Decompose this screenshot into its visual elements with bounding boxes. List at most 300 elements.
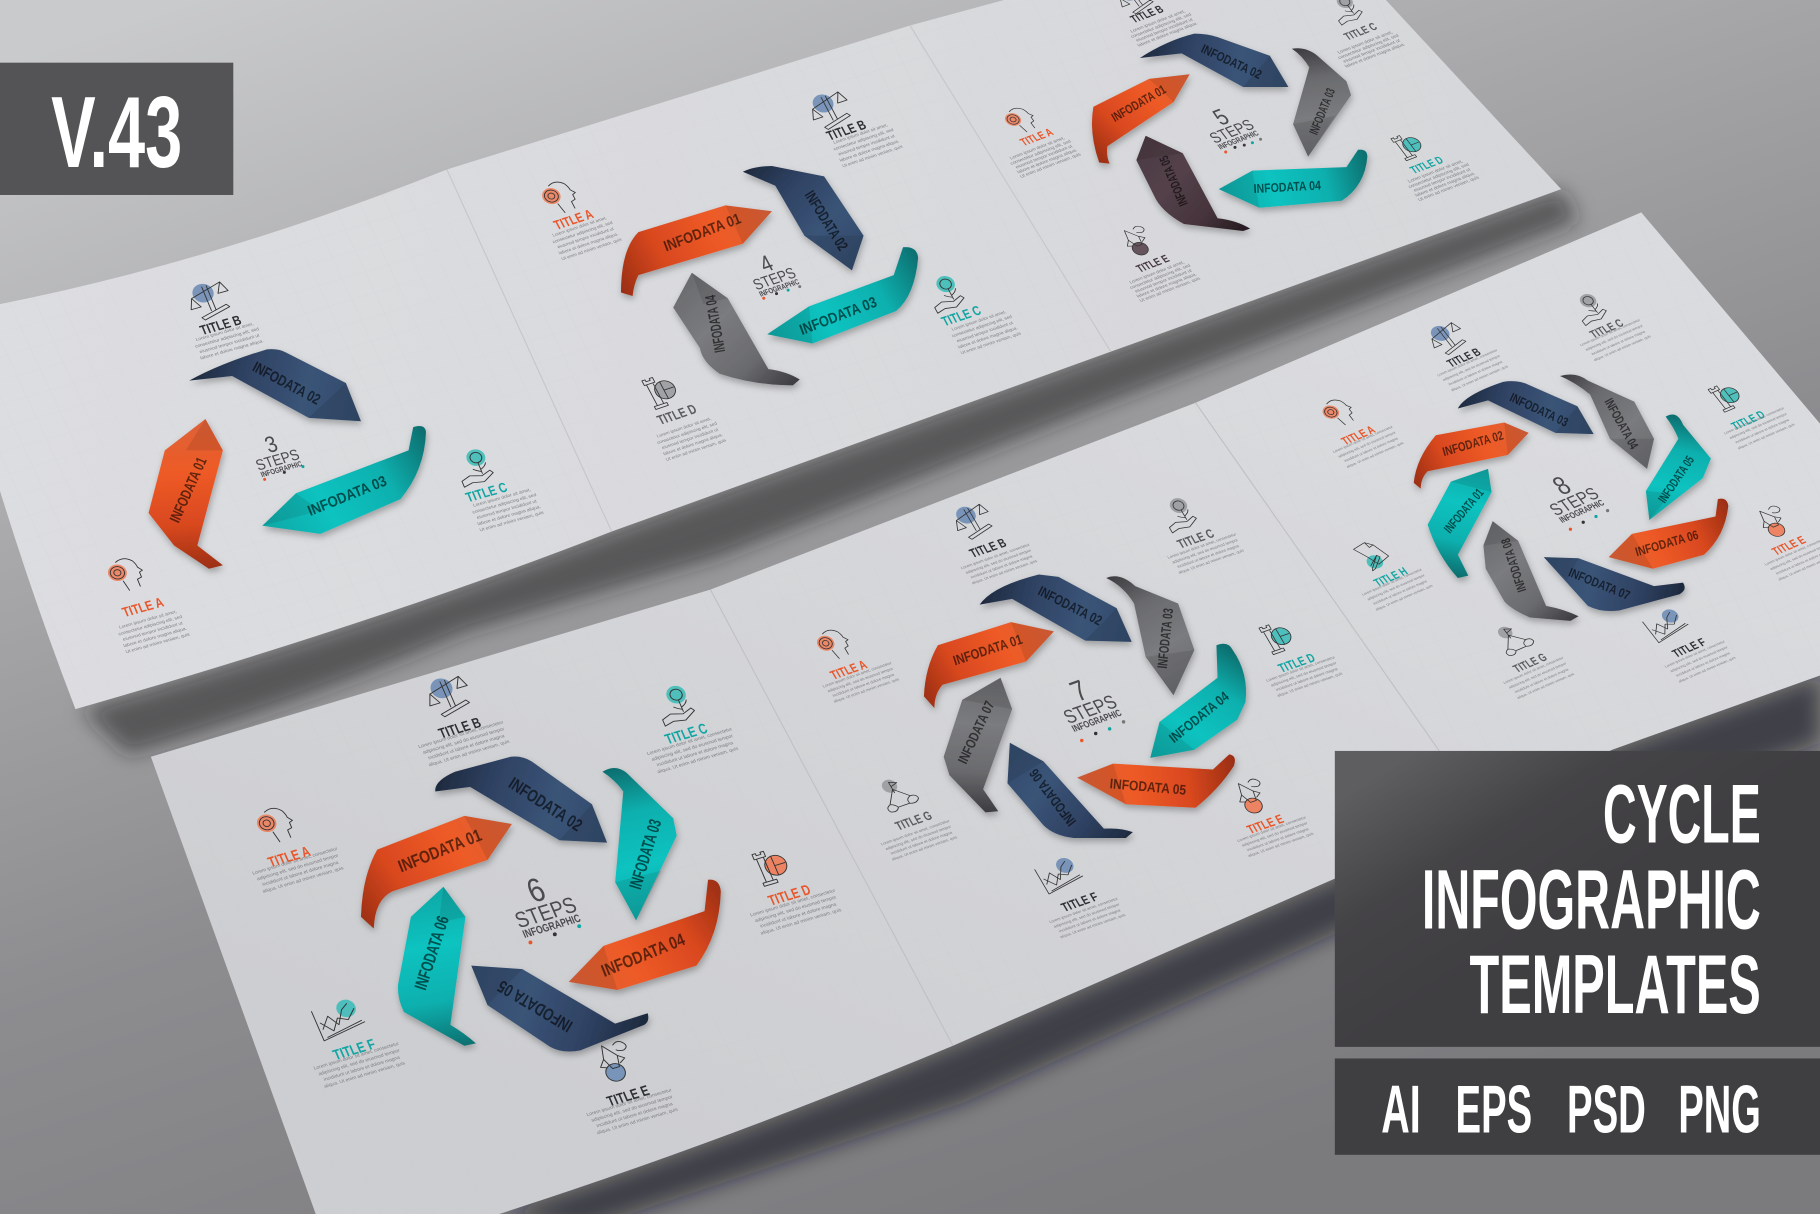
ribbon: infodata 04: INFODATA 04: [1602, 396, 1642, 452]
ribbon: infodata 04: [1150, 644, 1246, 758]
block: title C: [451, 447, 545, 532]
block: title F: TITLE F: [1669, 636, 1709, 660]
center label: 8: [1546, 470, 1577, 500]
block: title B: eiusmod tempor incididunt ut: [1135, 17, 1194, 43]
block: title B: Lorem ipsum dolor sit amet,: [195, 321, 254, 342]
block: title D: Lorem ipsum dolor sit amet, consectetur: [749, 888, 837, 918]
ribbon: infodata 03: INFODATA 03: [625, 817, 665, 891]
block: title B: TITLE B: [824, 117, 869, 143]
block: title A: Lorem ipsum dolor sit amet,: [1009, 136, 1066, 160]
block: title D: [641, 373, 728, 462]
block: title D: aliqua. Ut enim ad minim veniam, quis: [1276, 671, 1343, 698]
block: title A: [1000, 104, 1082, 179]
block: title A: consectetur adipiscing elit, sed: [1009, 139, 1072, 166]
block: title A: [104, 555, 191, 654]
center label: INFOGRAPHIC: [1557, 497, 1606, 525]
center label: STEPS: [253, 446, 302, 474]
block: title E: [1753, 504, 1820, 582]
block: title E: incididunt ut labore et dolore magna: [596, 1101, 674, 1129]
ribbon: infodata 03: [602, 768, 677, 920]
block: title F: adipiscing elit, sed do eiusmod tempor: [1053, 902, 1121, 929]
block: title D: Lorem ipsum dolor sit amet,: [1407, 159, 1464, 184]
block: title C: eiusmod tempor incididunt ut: [1342, 38, 1402, 64]
block: title E: [586, 1039, 681, 1137]
ribbon: infodata 02: [743, 166, 864, 270]
ribbon: infodata 01: INFODATA 01: [1441, 485, 1486, 536]
block: title D: Lorem ipsum dolor sit amet, consectetur: [1723, 406, 1786, 435]
ribbon: infodata 02: INFODATA 02: [1036, 583, 1105, 629]
block: title E: [1231, 777, 1317, 859]
block: title F: incididunt ut labore et dolore magna: [1058, 907, 1122, 933]
block: title F: Lorem ipsum dolor sit amet, consectetur: [1664, 639, 1727, 669]
block: title A: Lorem ipsum dolor sit amet, consectetur: [251, 846, 339, 877]
center label: STEPS: [1545, 483, 1603, 519]
block: title C: incididunt ut labore et dolore magna: [1176, 543, 1240, 569]
block: title C: aliqua. Ut enim ad minim veniam, quis: [1177, 548, 1245, 575]
block: title B: [183, 278, 265, 361]
block: title B: Lorem ipsum dolor sit amet,: [832, 122, 888, 145]
center label: INFOGRAPHIC: [521, 912, 583, 941]
ribbon: infodata 05: INFODATA 05: [494, 976, 576, 1037]
block: title E: adipiscing elit, sed do eiusmod tempor: [1241, 820, 1309, 848]
block: title A: consectetur adipiscing elit, sed: [552, 220, 614, 244]
block: title D: consectetur adipiscing elit, sed: [1407, 162, 1470, 189]
ribbon: infodata 02: INFODATA 02: [1199, 41, 1264, 82]
block: title D: Lorem ipsum dolor sit amet,: [656, 416, 712, 438]
center label: [245, 427, 304, 481]
block: title C: Lorem ipsum dolor sit amet,: [951, 309, 1007, 332]
block: title C: Ut enim ad minim veniam, quis: [479, 510, 545, 532]
block: title B: labore et dolore magna aliqua.: [839, 139, 900, 163]
block: title A: TITLE A: [1018, 126, 1056, 148]
formats panel: AI: [1381, 1073, 1421, 1148]
block: title E: TITLE E: [604, 1083, 652, 1110]
block: title B: incididunt ut labore et dolore magna: [1448, 360, 1504, 386]
block: title C: Ut enim ad minim veniam, quis: [960, 331, 1022, 355]
block: title B: incididunt ut labore et dolore magna: [970, 553, 1034, 579]
block: title B: [1111, 0, 1199, 48]
block: title F: Lorem ipsum dolor sit amet, consectetur: [313, 1041, 400, 1072]
block: title B: aliqua. Ut enim ad minim veniam, quis: [428, 739, 511, 768]
ribbon: infodata 04: [569, 880, 721, 990]
block: title B: [1422, 319, 1511, 393]
ribbon: infodata 06: [1008, 743, 1133, 838]
block: title H: TITLE H: [1371, 565, 1411, 589]
center label: 6: [521, 871, 551, 910]
block: title B: [947, 500, 1040, 586]
block: title C: [646, 683, 742, 776]
block: title B: labore et dolore magna aliqua.: [1136, 21, 1199, 47]
block: title A: Lorem ipsum dolor sit amet, consectetur: [1332, 425, 1395, 454]
block: title E: eiusmod tempor incididunt ut: [1134, 268, 1193, 294]
top sheet: [0, 0, 1561, 709]
block: title E: aliqua. Ut enim ad minim veniam, quis: [596, 1107, 679, 1136]
block: title H: adipiscing elit, sed do eiusmod tempor: [1366, 573, 1426, 601]
block: title G: TITLE G: [892, 808, 935, 833]
block: title C: incididunt ut labore et dolore magna: [1590, 330, 1647, 356]
block: title B: [803, 88, 904, 168]
block: title E: [1118, 224, 1202, 303]
panel: 8 steps diagram: [1317, 291, 1820, 700]
block: title B: Lorem ipsum dolor sit amet, consectetur: [960, 542, 1031, 570]
block: title B: labore et dolore magna aliqua.: [199, 338, 264, 360]
ribbon: infodata 04: [1560, 374, 1654, 469]
block: title A: TITLE A: [266, 844, 313, 871]
ribbon: infodata 01: INFODATA 01: [662, 210, 743, 255]
block: title E: labore et dolore magna aliqua.: [1135, 272, 1198, 299]
center label: [1046, 668, 1125, 742]
version badge: V.43: [51, 77, 182, 189]
block: title A: adipiscing elit, sed do eiusmod tempor: [826, 666, 895, 693]
block: title B: adipiscing elit, sed do eiusmod tempor: [1442, 354, 1502, 382]
block: title C: Lorem ipsum dolor sit amet,: [472, 487, 531, 508]
ribbon: infodata 03: [1458, 381, 1594, 434]
ribbon: infodata 04: INFODATA 04: [1166, 688, 1232, 746]
ribbon: infodata 01: [149, 419, 223, 569]
ribbon: infodata 02: [435, 757, 607, 843]
block: title F: aliqua. Ut enim ad minim veniam, quis: [1678, 656, 1737, 684]
block: title E: Lorem ipsum dolor sit amet, consectetur: [1236, 815, 1307, 843]
block: title F: TITLE F: [1058, 889, 1101, 914]
block: title F: incididunt ut labore et dolore magna: [323, 1055, 401, 1083]
block: title D: [1390, 131, 1481, 202]
panel: 4 steps diagram: [537, 88, 1022, 462]
center label: INFOGRAPHIC: [1070, 708, 1124, 735]
ribbon: infodata 03: INFODATA 03: [1154, 607, 1176, 669]
formats panel: [1335, 1058, 1820, 1155]
block: title B: incididunt ut labore et dolore magna: [427, 733, 506, 761]
center label: INFOGRAPHIC: [259, 460, 303, 479]
ribbon: infodata 05: [1646, 414, 1711, 520]
block: title C: Lorem ipsum dolor sit amet, consectetur: [1579, 318, 1642, 347]
block: title C: consectetur adipiscing elit, sed: [472, 492, 537, 515]
block: title C: [1156, 496, 1247, 575]
ribbon: infodata 02: INFODATA 02: [801, 188, 851, 254]
center label: INFOGRAPHIC: [1216, 128, 1261, 151]
block: title E: TITLE E: [1769, 534, 1809, 558]
ribbon: infodata 04: INFODATA 04: [598, 929, 688, 981]
block: title A: TITLE A: [551, 206, 596, 233]
ribbon: infodata 03: INFODATA 03: [1306, 86, 1338, 137]
ribbon: infodata 02: [189, 349, 361, 421]
block: title B: [417, 672, 513, 769]
ribbon: infodata 05: INFODATA 05: [1655, 453, 1697, 506]
block: title G: Lorem ipsum dolor sit amet, consectetur: [880, 818, 951, 846]
block: title E: Lorem ipsum dolor sit amet, consectetur: [586, 1087, 673, 1118]
block: title G: TITLE G: [1510, 651, 1550, 675]
ribbon: infodata 02: INFODATA 02: [250, 359, 323, 409]
block: title B: consectetur adipiscing elit, sed: [1130, 12, 1193, 39]
block: title E: adipiscing elit, sed do eiusmod tempor: [590, 1094, 674, 1124]
block: title A: aliqua. Ut enim ad minim veniam, quis: [262, 865, 345, 895]
block: title F: adipiscing elit, sed do eiusmod tempor: [318, 1048, 401, 1077]
ribbon: infodata 03: INFODATA 03: [797, 294, 879, 339]
block: title G: incididunt ut labore et dolore magna: [1514, 667, 1570, 694]
block: title C: consectetur adipiscing elit, sed: [1337, 33, 1400, 60]
block: title C: aliqua. Ut enim ad minim veniam, quis: [656, 746, 740, 775]
block: title D: consectetur adipiscing elit, sed: [656, 421, 718, 445]
formats panel: EPS: [1456, 1073, 1532, 1148]
block: title F: aliqua. Ut enim ad minim veniam, quis: [1059, 912, 1126, 939]
center label: 3: [261, 432, 282, 458]
ribbon: infodata 01: [1092, 74, 1190, 164]
block: title C: Lorem ipsum dolor sit amet, consectetur: [646, 726, 734, 757]
block: title C: Lorem ipsum dolor sit amet,: [1336, 30, 1394, 55]
formats panel: PNG: [1678, 1073, 1761, 1148]
block: title A: TITLE A: [1338, 423, 1378, 448]
block: title F: [1641, 606, 1739, 684]
block: title A: incididunt ut labore et dolore magna: [1343, 436, 1400, 463]
ribbon: infodata 03: INFODATA 03: [1508, 390, 1571, 430]
block: title D: Ut enim ad minim veniam, quis: [665, 437, 728, 462]
block: title B: eiusmod tempor incididunt ut: [837, 133, 896, 156]
block: title D: eiusmod tempor incididunt ut: [1412, 167, 1472, 193]
ribbon: infodata 02: [1414, 422, 1529, 489]
block: title F: TITLE F: [331, 1036, 378, 1064]
block: title C: labore et dolore magna aliqua.: [1344, 42, 1406, 69]
block: title C: adipiscing elit, sed do eiusmod tempor: [1171, 537, 1239, 564]
center label: STEPS: [1060, 692, 1121, 728]
ribbon: infodata 04: INFODATA 04: [1253, 177, 1322, 196]
block: title D: TITLE D: [1275, 650, 1318, 675]
block: title B: adipiscing elit, sed do eiusmod tempor: [964, 548, 1033, 575]
ribbon: infodata 01: [924, 622, 1054, 708]
block: title B: consectetur adipiscing elit, sed: [194, 326, 260, 349]
block: title C: labore et dolore magna aliqua.: [957, 325, 1018, 349]
ribbon: infodata 01: [621, 205, 772, 296]
block: title A: labore et dolore magna aliqua.: [123, 626, 188, 648]
block: title D: aliqua. Ut enim ad minim veniam, quis: [1737, 423, 1796, 450]
ribbon: infodata 02: INFODATA 02: [1441, 427, 1505, 459]
ribbon: infodata 07: [944, 678, 1012, 812]
block: title B: Lorem ipsum dolor sit amet, consectetur: [1436, 348, 1499, 377]
block: title E: Ut enim ad minim veniam, quis: [1138, 276, 1202, 303]
block: title A: Lorem ipsum dolor sit amet,: [118, 609, 177, 630]
block: title A: consectetur adipiscing elit, sed: [118, 614, 183, 636]
block: title G: Lorem ipsum dolor sit amet, consectetur: [1503, 656, 1565, 685]
ribbon: infodata 03: [262, 426, 426, 534]
block: title B: Ut enim ad minim veniam, quis: [841, 144, 904, 168]
block: title D: adipiscing elit, sed do eiusmod tempor: [1270, 660, 1338, 687]
block: title A: Ut enim ad minim veniam, quis: [560, 237, 623, 261]
block: title A: adipiscing elit, sed do eiusmod tempor: [256, 853, 340, 882]
block: title A: [1317, 396, 1407, 469]
top sheet shadow: [81, 189, 1579, 754]
block: title C: adipiscing elit, sed do eiusmod tempor: [651, 733, 734, 763]
block: title A: [537, 178, 623, 261]
block: title B: Lorem ipsum dolor sit amet, consectetur: [417, 719, 505, 750]
ribbon: infodata 01: INFODATA 01: [395, 825, 485, 876]
block: title A: labore et dolore magna aliqua.: [558, 231, 619, 255]
ribbon: infodata 01: INFODATA 01: [1109, 82, 1169, 125]
center label: 7: [1064, 674, 1094, 708]
block: title C: eiusmod tempor incididunt ut: [476, 499, 538, 520]
block: title B: Lorem ipsum dolor sit amet,: [1129, 9, 1186, 34]
center label: STEPS: [750, 264, 799, 294]
version badge: [0, 63, 233, 195]
block: title F: aliqua. Ut enim ad minim veniam, quis: [323, 1060, 407, 1090]
block: title B: eiusmod tempor incididunt ut: [199, 333, 261, 354]
block: title C: eiusmod tempor incididunt ut: [956, 320, 1015, 343]
block: title C: [1567, 291, 1654, 363]
block: title H: Lorem ipsum dolor sit amet, consectetur: [1361, 567, 1424, 597]
center label: [499, 864, 584, 944]
block: title D: TITLE D: [1728, 408, 1768, 433]
block: title G: [1490, 620, 1577, 700]
block: title C: [922, 273, 1022, 355]
ribbon: infodata 04: [673, 273, 800, 385]
block: title A: aliqua. Ut enim ad minim veniam, quis: [1346, 441, 1405, 469]
block: title D: incididunt ut labore et dolore magna: [1734, 418, 1791, 444]
ribbon: infodata 05: INFODATA 05: [1156, 154, 1191, 209]
block: title D: [1707, 381, 1798, 451]
center label: STEPS: [1206, 116, 1258, 147]
block: title E: aliqua. Ut enim ad minim veniam, quis: [1247, 831, 1314, 858]
block: title C: [1324, 0, 1407, 69]
title panel: [1335, 751, 1820, 1047]
block: title D: [1258, 620, 1346, 698]
ribbon: infodata 08: INFODATA 08: [1498, 536, 1529, 594]
block: title D: [749, 847, 845, 937]
block: title A: adipiscing elit, sed do eiusmod tempor: [1337, 430, 1397, 458]
ribbon: infodata 03: [767, 247, 918, 344]
block: title A: Ut enim ad minim veniam, quis: [125, 632, 191, 654]
block: title C: labore et dolore magna aliqua.: [477, 504, 542, 526]
block: title B: TITLE B: [198, 313, 244, 339]
ribbon: infodata 01: INFODATA 01: [951, 631, 1025, 668]
block: title F: incididunt ut labore et dolore magna: [1675, 651, 1732, 678]
ribbon: infodata 02: [1140, 34, 1288, 87]
block: title F: adipiscing elit, sed do eiusmod tempor: [1669, 645, 1729, 673]
block: title D: Ut enim ad minim veniam, quis: [1417, 175, 1481, 202]
block: title B: TITLE B: [436, 715, 484, 742]
ribbon: infodata 04: [1219, 150, 1367, 208]
block: title A: eiusmod tempor incididunt ut: [122, 620, 184, 642]
block: title F: [1034, 855, 1129, 940]
ribbon: infodata 07: INFODATA 07: [954, 698, 997, 766]
block: title A: TITLE A: [120, 595, 167, 621]
block: title C: TITLE C: [1342, 21, 1380, 43]
ribbon: infodata 01: [1428, 469, 1492, 578]
block: title G: [873, 774, 960, 862]
block: title G: aliqua. Ut enim ad minim veniam, quis: [1516, 672, 1575, 700]
block: title E: TITLE E: [1244, 812, 1287, 837]
ribbon: infodata 06: INFODATA 06: [1026, 766, 1079, 829]
block: title C: TITLE C: [1175, 526, 1217, 551]
block: title E: consectetur adipiscing elit, sed: [1129, 263, 1192, 290]
block: title C: TITLE C: [464, 480, 510, 506]
block: title C: incididunt ut labore et dolore magna: [656, 740, 734, 768]
block: title A: eiusmod tempor incididunt ut: [556, 226, 615, 249]
block: title D: labore et dolore magna aliqua.: [1414, 171, 1476, 198]
block: title B: consectetur adipiscing elit, sed: [832, 127, 895, 151]
block: title A: incididunt ut labore et dolore magna: [831, 672, 896, 698]
ribbon: infodata 06: [1609, 499, 1728, 569]
ribbon: infodata 07: INFODATA 07: [1567, 565, 1632, 603]
block: title A: eiusmod tempor incididunt ut: [1014, 144, 1074, 169]
block: title C: TITLE C: [1587, 316, 1627, 341]
center label: STEPS: [511, 892, 580, 933]
block: title E: TITLE E: [1134, 253, 1172, 275]
formats panel: PSD: [1567, 1073, 1646, 1148]
block: title D: Lorem ipsum dolor sit amet, consectetur: [1265, 654, 1336, 683]
block: title E: Lorem ipsum dolor sit amet,: [1128, 260, 1185, 285]
ribbon: infodata 01: INFODATA 01: [167, 455, 211, 525]
block: title D: TITLE D: [766, 882, 813, 909]
ribbon: infodata 06: [398, 887, 476, 1046]
block: title D: TITLE D: [654, 401, 699, 428]
ribbon: infodata 08: [1483, 521, 1579, 621]
ribbon: infodata 06: INFODATA 06: [410, 913, 453, 992]
block: title A: Lorem ipsum dolor sit amet,: [551, 215, 608, 238]
block: title B: TITLE B: [967, 535, 1009, 560]
block: title A: Ut enim ad minim veniam, quis: [1019, 152, 1082, 179]
ribbon: infodata 02: [980, 575, 1132, 642]
bottom sheet: [151, 212, 1820, 1214]
center label: 5: [1208, 104, 1235, 131]
ribbon: infodata 03: [1292, 48, 1351, 157]
block: title F: Lorem ipsum dolor sit amet, consectetur: [1048, 896, 1119, 924]
block: title G: aliqua. Ut enim ad minim veniam, quis: [891, 835, 958, 861]
block: title A: Lorem ipsum dolor sit amet, consectetur: [822, 660, 893, 689]
block: title D: TITLE D: [1408, 154, 1446, 176]
block: title C: aliqua. Ut enim ad minim veniam, quis: [1593, 334, 1652, 362]
center label: [1192, 99, 1262, 154]
block: title A: [251, 804, 347, 895]
block: title B: aliqua. Ut enim ad minim veniam, quis: [971, 558, 1038, 585]
block: title G: adipiscing elit, sed do eiusmod tempor: [884, 824, 953, 851]
panel: 5 steps diagram: [1000, 0, 1481, 303]
block: title D: incididunt ut labore et dolore magna: [759, 902, 838, 930]
ribbon: infodata 06: INFODATA 06: [1633, 527, 1700, 559]
ribbon: infodata 01: [361, 816, 512, 928]
block: title F: [311, 997, 409, 1090]
block: title D: labore et dolore magna aliqua.: [662, 432, 724, 456]
block: title B: adipiscing elit, sed do eiusmod tempor: [422, 726, 506, 756]
panel: 6 steps diagram: [251, 672, 845, 1137]
block: title D: aliqua. Ut enim ad minim veniam, quis: [760, 907, 843, 937]
ribbon: infodata 04: INFODATA 04: [702, 293, 729, 354]
block: title C: adipiscing elit, sed do eiusmod tempor: [1585, 324, 1645, 352]
block: title B: TITLE B: [1444, 345, 1484, 370]
block: title A: TITLE A: [827, 657, 870, 682]
block: title A: [812, 626, 902, 704]
block: title D: adipiscing elit, sed do eiusmod tempor: [754, 895, 838, 924]
block: title C: Lorem ipsum dolor sit amet, consectetur: [1166, 531, 1238, 560]
center label: [1529, 463, 1609, 531]
block: title G: adipiscing elit, sed do eiusmod tempor: [1508, 661, 1568, 689]
panel: 3 steps diagram: [104, 278, 545, 654]
ribbon: infodata 05: [1136, 136, 1250, 231]
block: title A: aliqua. Ut enim ad minim veniam, quis: [833, 677, 900, 704]
panel: 7 steps diagram: [812, 496, 1346, 940]
block: title A: incididunt ut labore et dolore magna: [261, 860, 340, 888]
block: title C: TITLE C: [663, 721, 710, 748]
block: title H: incididunt ut labore et dolore magna: [1372, 579, 1429, 606]
block: title E: incididunt ut labore et dolore magna: [1246, 826, 1310, 852]
ribbon: infodata 03: INFODATA 03: [305, 473, 389, 520]
ribbon: infodata 02: INFODATA 02: [505, 773, 586, 835]
center label: 4: [755, 251, 778, 278]
ribbon: infodata 05: [471, 966, 648, 1052]
block: title A: labore et dolore magna aliqua.: [1016, 148, 1078, 174]
block: title G: incididunt ut labore et dolore magna: [889, 830, 954, 856]
ribbon: infodata 07: [1544, 557, 1685, 611]
bottom sheet shadow: [499, 675, 1820, 1214]
block: title B: aliqua. Ut enim ad minim veniam, quis: [1450, 365, 1509, 392]
block: title C: TITLE C: [939, 302, 984, 329]
ribbon: infodata 03: [1106, 576, 1194, 695]
